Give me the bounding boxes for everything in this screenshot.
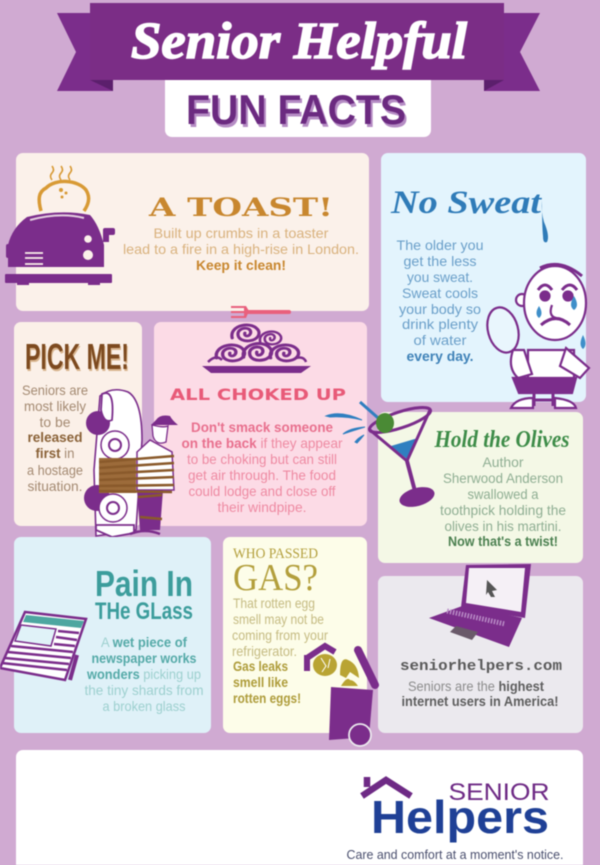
- logo: senior helpers: Care and comfort at a moment's notice.: [346, 847, 564, 862]
- text: sweat body: you sweat.: [407, 269, 473, 285]
- logo: senior helpers: SENIOR: [448, 779, 550, 806]
- icon: house roof: [362, 777, 411, 796]
- text: pick me body: Seniors are: [22, 382, 88, 398]
- text: olives body: Now that's a twist!: [448, 533, 558, 549]
- text: olives body: Author: [482, 454, 524, 470]
- text: gas body: refrigerator.: [232, 643, 297, 659]
- heading: all choked up: ALL CHOKED UP: [170, 385, 346, 404]
- text: gas body: coming from your: [232, 627, 328, 643]
- text: toast body: Built up crumbs in a toaster: [154, 225, 329, 241]
- panel: footer: [16, 750, 583, 865]
- panel: a toast: [5, 153, 369, 311]
- text: choked body: [182, 419, 343, 515]
- panel: pain in the glass: [14, 537, 211, 733]
- text: pain body: wonders picking up: [86, 666, 201, 682]
- subtitle box: fun facts: FUN FACTS: [186, 86, 406, 133]
- text: gas body: [232, 595, 328, 706]
- panel: all choked up: [154, 322, 367, 526]
- illustration: sweating man with mirror: [483, 264, 589, 408]
- text: sweat body: Sweat cools: [402, 285, 478, 301]
- title banner: [57, 3, 540, 91]
- panel: pick me: PICK ME!: [25, 336, 129, 377]
- text: sweat body: get the less: [404, 253, 476, 269]
- heading: a toast: A TOAST!: [148, 193, 333, 222]
- text: sweat body: The older you: [396, 237, 484, 253]
- text: olives body: olives in his martini.: [444, 518, 562, 534]
- text: olives body: toothpick holding the: [440, 502, 566, 518]
- text: toast body: Keep it clean!: [196, 257, 286, 273]
- text: sweat body: your body so: [399, 301, 481, 317]
- text: gas body: rotten eggs!: [233, 690, 301, 706]
- text: choked body: to be choking but can still: [187, 451, 337, 467]
- heading: hold the olives: Hold the Olives: [434, 427, 570, 453]
- icon: plate of spaghetti: [202, 325, 311, 373]
- icon: martini glass: [326, 402, 437, 510]
- text: choked body: on the back if they appear: [182, 435, 343, 451]
- text: gas body: That rotten egg: [233, 595, 315, 611]
- icon: newspaper: [0, 612, 86, 680]
- text: pain body: A wet piece of: [101, 634, 187, 650]
- text: gas body: smell may not be: [233, 611, 324, 627]
- text: pick me body: [22, 382, 88, 494]
- subtitle box: fun facts: FUN FACTS: [188, 89, 408, 136]
- liquid splash: [326, 414, 365, 443]
- text: gas body: Gas leaks: [233, 658, 288, 674]
- icon: fork: [231, 306, 291, 318]
- text: web body: internet users in America!: [402, 693, 558, 709]
- icon: toaster: [5, 166, 115, 285]
- text: toast body: lead to a fire in a high-rise in London.: [123, 241, 359, 257]
- text: pick me body: released: [28, 429, 82, 445]
- logo: senior helpers: [346, 777, 564, 862]
- text: pain body: a broken glass: [102, 698, 186, 714]
- text: choked body: could lodge and close off: [188, 483, 336, 499]
- text: sweat body: drink plenty: [402, 316, 478, 332]
- heading: who passed gas: WHO PASSED: [233, 546, 318, 562]
- icon: sweat drop: [542, 200, 548, 242]
- text: olives body: Sherwood Anderson: [443, 470, 563, 486]
- illustration: eggshells and trash bin: [307, 646, 375, 746]
- text: olives body: [440, 454, 566, 549]
- text: pain body: newspaper works: [92, 650, 197, 666]
- url: seniorhelpers.com: [400, 658, 562, 675]
- heading: pain in the glass: Pain In: [95, 563, 193, 604]
- text: pick me body: first in: [36, 445, 74, 461]
- title text: Senior Helpful: [131, 13, 468, 70]
- text: gas body: smell like: [233, 674, 288, 690]
- text: pick me body: to be: [40, 414, 71, 430]
- panel: who passed gas: [223, 537, 367, 733]
- text: pain body: the tiny shards from: [84, 682, 204, 698]
- text: olives body: swallowed a: [468, 486, 539, 502]
- panel: pick me: [14, 322, 142, 526]
- text: choked body: their windpipe.: [218, 499, 306, 515]
- text: pick me body: most likely: [24, 398, 86, 414]
- panel: hold the olives: [378, 412, 583, 563]
- text: pick me body: situation.: [28, 478, 82, 494]
- panel: who passed gas: GAS?: [233, 557, 318, 599]
- icon: sweat tears: [536, 296, 586, 349]
- text: pick me body: a hostage: [27, 462, 83, 478]
- text: choked body: Don't smack someone: [191, 419, 333, 435]
- illustration: hostage tied to toilet paper: [84, 390, 178, 537]
- text: toast body: [123, 225, 359, 273]
- text: sweat body: every day.: [406, 348, 474, 364]
- heading: pick me: PICK ME!: [26, 338, 130, 379]
- text: web body: Seniors are the highest: [408, 678, 544, 694]
- heading: no sweat: No Sweat: [390, 185, 542, 221]
- panel: seniorhelpers.com: [378, 576, 583, 733]
- text: sweat body: of water: [414, 332, 467, 348]
- text: choked body: get air through. The food: [188, 467, 336, 483]
- icon: laptop: [429, 564, 531, 647]
- panel: no sweat: [381, 153, 589, 408]
- text: sweat body: [396, 237, 484, 364]
- logo: senior helpers: Helpers: [371, 791, 549, 843]
- text: web body: [402, 678, 558, 709]
- ropes: [99, 456, 174, 519]
- panel: pain in the glass: THe GLass: [95, 598, 193, 625]
- text: pain body: [84, 634, 204, 714]
